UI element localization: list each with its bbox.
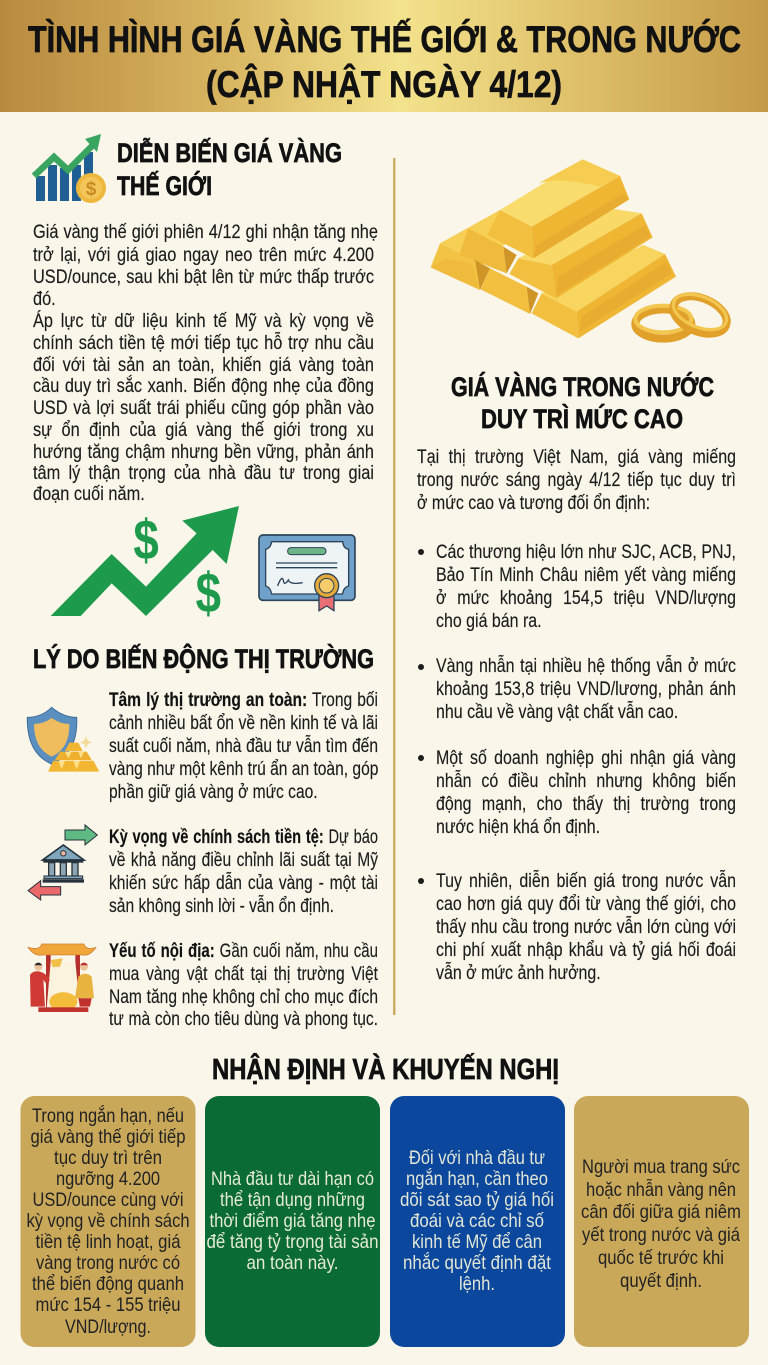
title bbox=[28, 18, 741, 105]
icon: green trend arrow with dollars: $ bbox=[133, 509, 159, 572]
bullet: gold bar brands: ở mức khoảng 154,5 triệu VND/lượng bbox=[436, 588, 736, 609]
card: long-term investors: thời điểm giá tăng nhẹ bbox=[210, 1210, 376, 1232]
text block: world gold summary: USD/ounce, sau khi bật lên từ mức thấp trước bbox=[33, 267, 374, 288]
text block: domestic factors: Nam tăng nhẹ không chỉ cho mục đích bbox=[108, 987, 377, 1008]
text block: world gold summary: Áp lực từ dữ liệu kinh tế Mỹ và kỳ vọng về bbox=[33, 311, 374, 332]
text block: world gold summary bbox=[33, 222, 378, 505]
text block: world gold summary: tâm lý thận trọng của nhà đầu tư trong giai bbox=[33, 463, 374, 484]
card: short-term outlook: VND/lượng. bbox=[65, 1316, 151, 1338]
middle-right bar bbox=[509, 208, 653, 298]
card: short-term outlook: USD/ounce cùng với bbox=[32, 1189, 184, 1211]
text block: monetary policy expectations bbox=[108, 827, 378, 917]
text block: monetary policy expectations: sản không sinh lời - vẫn ổn định. bbox=[108, 896, 334, 917]
text block: domestic intro: Tại thị trường Việt Nam, giá vàng miếng bbox=[417, 447, 736, 468]
heading: market reasons: LÝ DO BIẾN ĐỘNG THỊ TRƯỜNG bbox=[33, 643, 374, 674]
card: jewelry buyers: yết trong nước và giá bbox=[582, 1224, 740, 1246]
card: jewelry buyers: hoặc nhẫn vàng nên bbox=[586, 1178, 736, 1201]
text block: safe market sentiment: Tâm lý thị trường an toàn: Trong bối bbox=[108, 690, 378, 711]
card: jewelry buyers: cân đối giữa giá niêm bbox=[581, 1201, 741, 1223]
text block: safe market sentiment: phần giữ giá vàng ở mức cao. bbox=[108, 782, 317, 803]
heading: domestic gold bbox=[451, 371, 714, 434]
bullet: domestic premium: chi phí xuất nhập khẩu và tỷ giá hối đoái bbox=[436, 940, 736, 961]
title: (CẬP NHẬT NGÀY 4/12) bbox=[206, 63, 562, 105]
illustration: gold bars and rings bbox=[431, 159, 732, 341]
header banner bbox=[0, 0, 768, 112]
card: short-term outlook: kỳ vọng về chính sách bbox=[26, 1210, 190, 1232]
card: short-term outlook: ngưỡng 4.200 bbox=[56, 1168, 160, 1190]
card: short-term outlook bbox=[20, 1096, 196, 1347]
bullet: domestic premium: cao hơn giá quy đổi từ vàng thế giới, cho bbox=[436, 894, 736, 915]
text block: world gold summary: đoạn cuối năm. bbox=[33, 484, 145, 505]
icon: shield and gold bbox=[27, 707, 99, 772]
bullet: gold bar brands: cho giá bán ra. bbox=[436, 611, 542, 632]
icon: temple with gold buyers bbox=[28, 944, 96, 1012]
text block: domestic intro: trong nước sáng ngày 4/12 tiếp tục duy trì bbox=[417, 470, 736, 491]
card: short-term investors: kinh tế Mỹ để cân bbox=[412, 1231, 542, 1253]
text block: world gold summary: cầu duy trì sắc xanh. Biến động nhẹ của đồng bbox=[33, 376, 374, 397]
text block: world gold summary: hướng tăng chậm nhưng bền vững, phản ánh bbox=[33, 442, 374, 462]
bullet: enterprise adjustments: Một số doanh nghiệp ghi nhận giá vàng bbox=[436, 748, 736, 769]
text block: domestic factors: tư mà còn cho tiêu dùng và phong tục. bbox=[108, 1009, 377, 1030]
card: short-term outlook: tục duy trì trên bbox=[54, 1147, 162, 1169]
card: jewelry buyers: Người mua trang sức bbox=[582, 1156, 740, 1178]
top bar bbox=[487, 159, 629, 258]
text block: domestic factors bbox=[108, 941, 378, 1030]
text block: safe market sentiment: vàng như một kênh trú ẩn an toàn, góp bbox=[108, 759, 378, 780]
text block: domestic factors: mua vàng vật chất tại thị trường Việt bbox=[108, 964, 377, 985]
heading: world gold bbox=[117, 137, 342, 201]
text block: monetary policy expectations: khiến sức hấp dẫn của vàng - một tài bbox=[108, 873, 377, 894]
text block: world gold summary: sự ổn định của giá vàng thế giới trong xu bbox=[33, 420, 374, 441]
bullet: gold ring prices: nhu cầu về vàng vật chất vẫn cao. bbox=[436, 702, 678, 723]
text block: world gold summary: đối với tài sản an toàn, khiến giá vàng toàn bbox=[33, 354, 374, 376]
bullet: enterprise adjustments: nhẫn có điều chỉnh nhưng không biến bbox=[436, 771, 736, 792]
text block: safe market sentiment bbox=[108, 690, 378, 803]
card: short-term investors: ngắn hạn, cần theo bbox=[406, 1167, 548, 1190]
bullet: enterprise adjustments: nước hiện khá ổn định. bbox=[436, 817, 600, 838]
heading: world gold: DIỄN BIẾN GIÁ VÀNG bbox=[117, 137, 342, 168]
back-left bars bbox=[431, 210, 538, 314]
card: short-term outlook: tiền tệ linh hoạt, giá bbox=[36, 1231, 181, 1253]
heading: world gold: THẾ GIỚI bbox=[117, 170, 212, 201]
bullet: gold ring prices: Vàng nhẫn tại nhiều hệ thống vẫn ở mức bbox=[436, 656, 736, 677]
gold rings bbox=[635, 287, 732, 341]
text block: safe market sentiment: cảnh nhiều bất ổn về nền kinh tế và lãi bbox=[108, 713, 377, 734]
card: short-term investors: dõi sát sao tỷ giá hối bbox=[400, 1189, 554, 1211]
card: long-term investors: Nhà đầu tư dài hạn có bbox=[211, 1168, 374, 1190]
text block: domestic factors: Yếu tố nội địa: Gần cuối năm, nhu cầu bbox=[108, 941, 377, 962]
text block: monetary policy expectations: Kỳ vọng về chính sách tiền tệ: Dự báo bbox=[108, 827, 377, 848]
card: short-term outlook: Trong ngắn hạn, nếu bbox=[32, 1104, 184, 1127]
bullet: gold ring prices: khoảng 153,8 triệu VND/lương, phản ánh bbox=[436, 679, 736, 700]
card: jewelry buyers bbox=[574, 1096, 749, 1347]
card: short-term outlook: thể biến động quanh bbox=[32, 1273, 184, 1295]
bullet: domestic premium: thấy nhu cầu trong nước vẫn lớn cùng với bbox=[436, 917, 736, 938]
bullet: gold bar brands bbox=[418, 542, 736, 632]
bottom-right bar bbox=[532, 245, 676, 338]
card: short-term investors: đoái và các chỉ số bbox=[410, 1210, 544, 1232]
icon: green trend arrow with dollars: $ bbox=[196, 563, 221, 626]
card: short-term outlook: giá vàng thế giới tiếp bbox=[30, 1126, 186, 1148]
text block: world gold summary: Giá vàng thế giới phiên 4/12 ghi nhận tăng nhẹ bbox=[33, 222, 378, 243]
card: short-term outlook: vàng trong nước có bbox=[36, 1252, 180, 1274]
bullet: domestic premium: Tuy nhiên, diễn biến giá trong nước vẫn bbox=[436, 871, 736, 892]
card: jewelry buyers: quốc tế trước khi bbox=[598, 1247, 724, 1269]
card: short-term investors bbox=[390, 1096, 565, 1347]
icon: green trend arrow with dollars bbox=[51, 506, 239, 626]
card: short-term investors: nhắc quyết định đặt bbox=[403, 1251, 552, 1274]
bullet: domestic premium: vẫn ở mức ảnh hưởng. bbox=[436, 963, 601, 984]
bullet: enterprise adjustments: động mạnh, cho thấy thị trường trong bbox=[436, 794, 736, 815]
card: short-term investors: Đối với nhà đầu tư bbox=[409, 1147, 545, 1169]
bullet: gold bar brands: Bảo Tín Minh Châu niêm yết vàng miếng bbox=[436, 565, 736, 586]
card: short-term outlook: mức 154 - 155 triệu bbox=[36, 1294, 180, 1316]
card: jewelry buyers: quyết định. bbox=[620, 1270, 702, 1292]
text block: monetary policy expectations: về khả năng điều chỉnh lãi suất tại Mỹ bbox=[108, 850, 377, 871]
bullet: enterprise adjustments bbox=[418, 748, 736, 838]
card: long-term investors: an toàn này. bbox=[246, 1252, 338, 1274]
icon: certificate bbox=[259, 535, 355, 611]
text block: safe market sentiment: suất cuối năm, nhà đầu tư vẫn tìm đến bbox=[108, 736, 377, 757]
icon: bank with arrows bbox=[28, 825, 97, 900]
heading: domestic gold: DUY TRÌ MỨC CAO bbox=[481, 403, 683, 434]
bullet: gold ring prices bbox=[418, 654, 736, 723]
text block: domestic intro: ở mức cao và tương đối ổn định: bbox=[417, 493, 650, 514]
heading: assessment and recommendations: NHẬN ĐỊNH VÀ KHUYẾN NGHỊ bbox=[212, 1052, 559, 1086]
icon: rising chart with coin: $ bbox=[86, 179, 97, 200]
card: long-term investors: thể tận dụng những bbox=[220, 1189, 365, 1211]
card: short-term investors: lệnh. bbox=[459, 1273, 495, 1295]
text block: world gold summary: trở lại, với giá giao ngay neo trên mức 4.200 bbox=[33, 245, 374, 266]
text block: world gold summary: USD và lợi suất trái phiếu cũng góp phần vào bbox=[33, 398, 374, 419]
text block: world gold summary: chính sách tiền tệ mới tiếp tục hỗ trợ nhu cầu bbox=[33, 333, 374, 354]
bullet: gold bar brands: Các thương hiệu lớn như SJC, ACB, PNJ, bbox=[436, 542, 736, 563]
text block: domestic intro bbox=[417, 447, 736, 514]
card: long-term investors bbox=[205, 1096, 380, 1347]
card: long-term investors: để tăng tỷ trọng tài sản bbox=[206, 1231, 378, 1253]
icon: rising chart with coin bbox=[34, 134, 106, 203]
bullet: domestic premium bbox=[418, 870, 736, 984]
text block: world gold summary: đó. bbox=[33, 289, 56, 310]
